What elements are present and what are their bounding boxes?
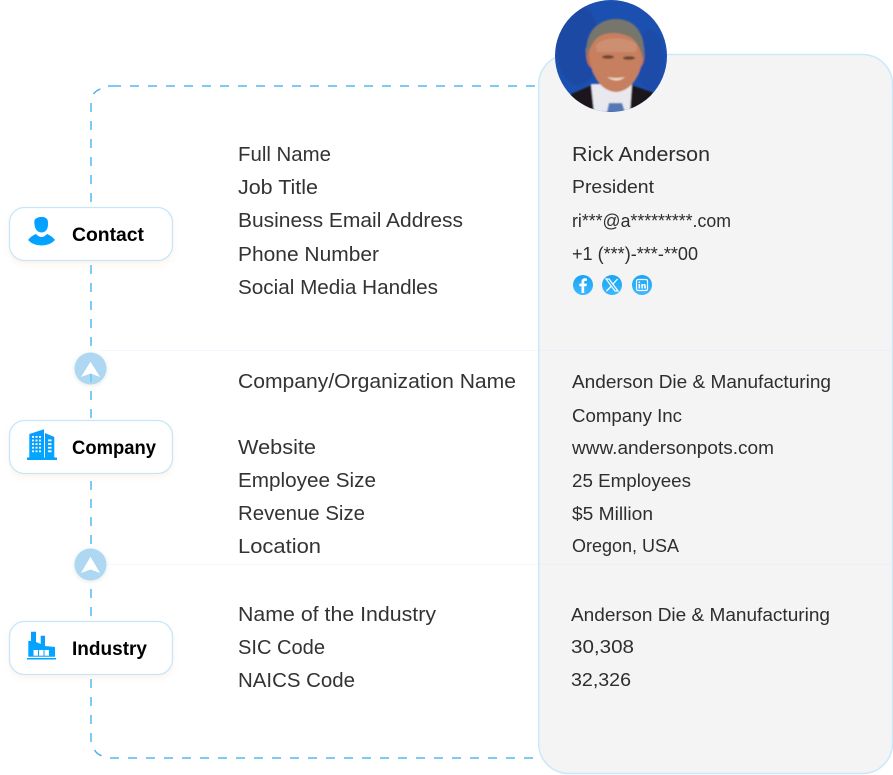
icon: Facebook [573,275,593,295]
card: Company [10,420,172,474]
text block: contact fields: Phone Number [238,244,379,266]
text block: company values: Oregon, USA [572,535,680,556]
row divider: company and industry [108,564,893,565]
social icons [573,275,652,295]
text block: contact fields [238,144,463,299]
text block: contact values: President [572,176,654,197]
text block: contact values [572,144,731,264]
text block: company values: www.andersonpots.com [571,437,774,458]
text block: industry values: 30,308 [571,636,634,657]
text block: contact values: Rick Anderson [572,144,710,166]
text block: company fields: Location [238,536,321,558]
label: Industry: Industry [72,639,147,660]
text block: industry fields [238,604,436,692]
dashed connector [91,86,536,758]
text block: contact fields: Job Title [238,177,318,199]
card: Contact [10,208,172,260]
text block: industry values: Anderson Die & Manufacturing [571,604,830,625]
arrow badge: company to industry [74,548,106,580]
text block: company values: 25 Employees [572,470,691,491]
text block: company fields: Employee Size [238,470,376,492]
text block: company fields: Company/Organization Name [238,371,516,393]
text block: company values: Anderson Die & Manufacturing [572,371,831,392]
text block: contact fields: Full Name [238,144,331,166]
text block: contact fields: Business Email Address [238,210,463,232]
text block: contact values: ri***@a*********.com [572,210,731,231]
arrow badge: contact to company [74,352,106,384]
icon: X [602,275,622,295]
icon: office building [27,429,57,460]
text block: industry fields: Name of the Industry [238,604,436,626]
text block: industry values [571,604,830,690]
photo: Rick Anderson portrait [555,0,667,112]
text block: contact fields: Social Media Handles [238,277,438,299]
text block: company fields: Revenue Size [238,503,365,525]
label: Company: Company [72,438,156,459]
text block: company values: Company Inc [572,405,682,426]
icon: LinkedIn [632,275,652,295]
card: Industry [10,622,172,674]
panel: profile values [539,54,892,774]
icon: person [28,217,55,246]
text block: industry fields: SIC Code [238,637,325,659]
text block: company fields [238,371,516,558]
text block: company values: $5 Million [572,503,653,524]
text block: company values [571,371,831,556]
text block: contact values: +1 (***)-***-**00 [572,243,698,264]
row divider: contact and company [100,350,893,351]
label: Contact: Contact [72,225,145,246]
text block: industry values: 32,326 [571,669,631,690]
icon: factory [27,632,56,660]
text block: company fields: Website [238,437,316,459]
text block: industry fields: NAICS Code [238,670,355,692]
